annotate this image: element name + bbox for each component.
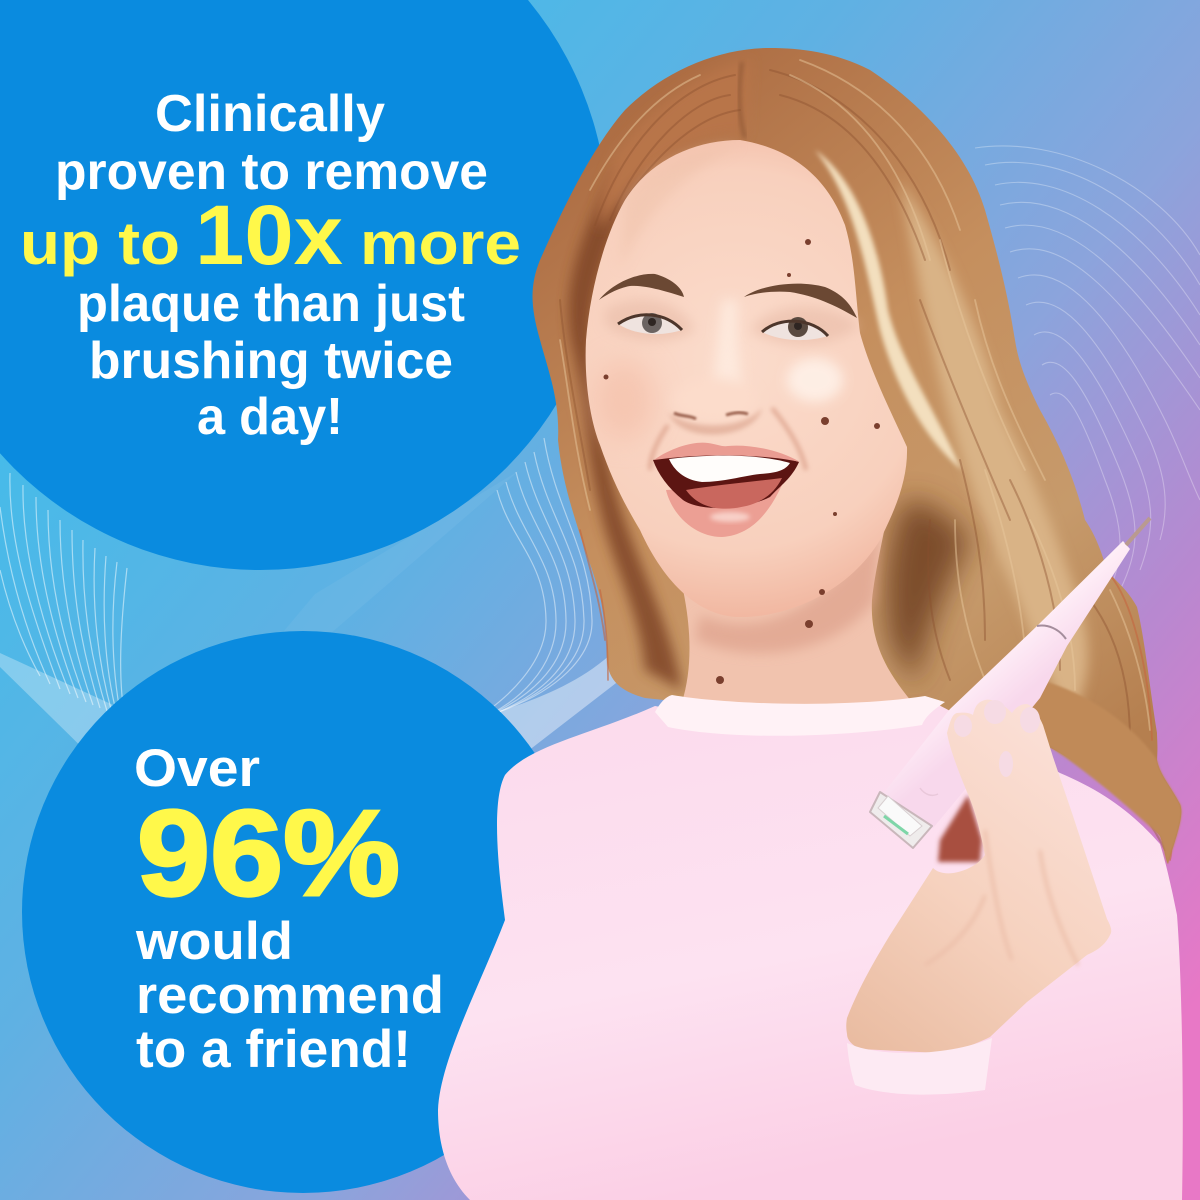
highlight: up to 10x more: up to [20,210,180,277]
highlight: up to 10x more: 10x [195,188,343,282]
stat: 96%: 96% [137,785,400,921]
hand [846,700,1111,1053]
nose shadow [668,408,762,434]
forehead shade [620,145,740,270]
hair: right light mass [900,180,1088,720]
neck shadow [695,530,880,653]
highlight: up to 10x more: more [360,210,521,277]
hair: dark left strand [569,165,682,690]
device body [883,541,1130,828]
smile folds [650,408,806,470]
nose bridge [712,300,742,397]
line: plaque than just: plaque than just [77,275,465,333]
lip gloss [710,512,750,522]
left eyebrow [599,274,684,300]
line: a day!: a day! [197,388,343,446]
cheek glow [787,358,843,402]
hair: blonde front highlight [815,150,962,470]
sleeve cuff [847,1038,992,1095]
tongue [686,478,782,509]
eye socket shading [605,300,860,344]
line: to a friend!: to a friend! [136,1020,411,1079]
lower hair over shoulder [1000,680,1181,864]
line: brushing twice: brushing twice [89,332,453,390]
line: would: would [135,912,293,971]
background wave lines: centre right [465,438,592,725]
highlight: up to 10x more [20,188,521,282]
hair: strands [560,60,1171,860]
text: recommendation stat [134,739,444,1079]
device head [870,792,932,848]
finger creases [925,830,1078,965]
collar [655,695,945,736]
line: Clinically: Clinically [155,85,385,143]
left eye [618,313,682,334]
background wave lines: upper right [975,146,1200,600]
right eyebrow [744,284,857,318]
hair: base shape [532,48,1181,864]
teeth [669,456,790,482]
hair [532,48,1181,864]
device indicator [884,816,908,834]
mouth [653,443,800,537]
blue circle: top [0,0,608,570]
blue circle: bottom [22,631,584,1193]
background light band: centre [462,655,620,768]
device head glass [878,796,922,836]
lower lip [666,485,782,537]
background wave lines: lower left [0,473,127,719]
line: Over: Over [134,739,260,798]
nostrils [674,413,748,419]
line: recommend: recommend [136,966,444,1025]
device [870,518,1150,848]
hair: part shadow [739,62,745,138]
woman [438,48,1183,1200]
fingernails [954,700,1040,777]
device seam [1037,626,1066,639]
right eye [762,317,828,340]
moles [604,239,880,684]
mouth cavity [653,452,799,508]
left cheek flush [595,360,655,440]
hair: crown tone [600,60,750,230]
line: proven to remove: proven to remove [55,143,488,201]
upper lip [654,443,800,462]
device button [920,788,938,795]
text: clinical claim [20,85,521,446]
hand and device [846,518,1150,1095]
palm shadow [938,795,982,862]
nose tip [672,378,756,422]
neck [682,500,912,716]
device tip [1126,518,1150,545]
face [586,140,907,684]
hair: shadow behind neck [886,500,970,685]
background light band: left [0,653,150,768]
pink top [438,680,1183,1200]
